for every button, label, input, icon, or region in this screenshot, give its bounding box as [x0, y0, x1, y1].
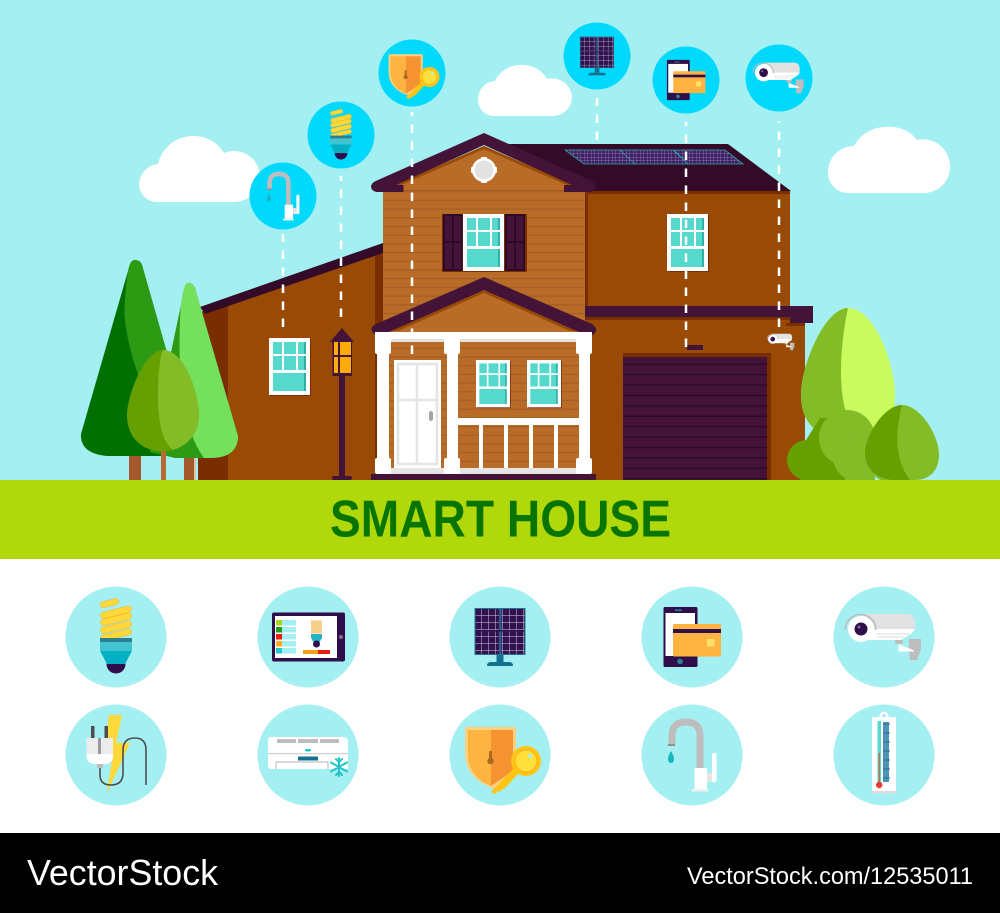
icon: thermometer: [834, 704, 934, 806]
footer url: VectorStock.com/12535011: [687, 863, 973, 890]
icon: shield and key: [450, 704, 550, 806]
left wing of house: [198, 243, 383, 480]
street lamp: [330, 328, 354, 480]
dashed connector lines: [283, 98, 779, 354]
top icon: faucet: [250, 162, 316, 230]
porch window left: [476, 360, 511, 408]
top icon: camera: [746, 44, 812, 112]
footer logo: VectorStock: [27, 852, 219, 893]
door: [394, 360, 441, 468]
white icon panel: [0, 559, 1000, 833]
railing: [457, 418, 579, 471]
ground band: [0, 480, 1000, 559]
icon: faucet: [642, 704, 742, 806]
top icon: bulb: [308, 102, 374, 168]
background: sky: [0, 0, 1000, 480]
icon: air conditioner: [258, 704, 358, 806]
garage: [623, 345, 771, 480]
top icon: phone and card: [652, 46, 720, 114]
solar panels on roof: [565, 150, 743, 164]
bushes right: [787, 308, 939, 481]
window: upper right: [667, 214, 709, 272]
porch roof: [372, 277, 596, 336]
icon: bulb: [66, 586, 166, 688]
porch beam: [375, 332, 592, 339]
icon: solar panel: [450, 586, 550, 688]
small camera on wall: [767, 334, 794, 350]
icon: plug: [66, 704, 166, 806]
right section of house: [507, 144, 813, 480]
awning band: [585, 306, 813, 323]
roof: right: [507, 144, 791, 191]
title: SMART HOUSE: [330, 490, 671, 548]
footer bar: [0, 833, 1000, 913]
roof: main gable: [371, 133, 596, 192]
columns: [375, 339, 592, 474]
porch: [371, 277, 596, 480]
clouds: [139, 65, 950, 202]
porch window right: [527, 360, 562, 408]
shutters and upper window: [442, 214, 527, 272]
main gable section of house: [371, 133, 596, 336]
icon: phone and card: [642, 586, 742, 688]
window: left wing: [269, 338, 311, 396]
trees left: [81, 260, 238, 480]
porch step: [371, 474, 596, 480]
top icon: solar panel: [564, 22, 630, 90]
round attic window: [471, 157, 497, 183]
top icon: shield and key: [378, 40, 446, 106]
icon: tablet: [258, 586, 358, 688]
icon: camera: [834, 586, 934, 688]
